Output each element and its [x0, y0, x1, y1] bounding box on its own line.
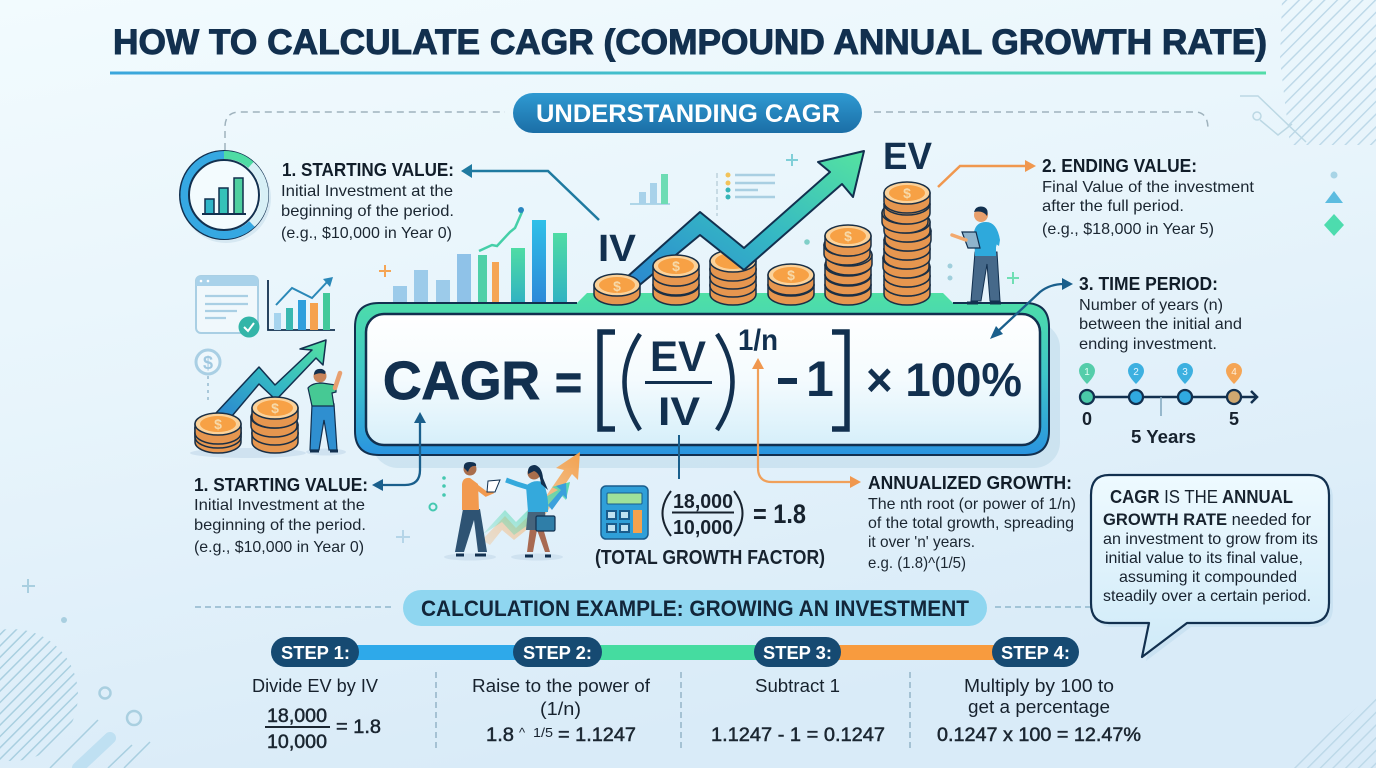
illustration: small chart [268, 277, 335, 330]
heading: calculation example [403, 590, 987, 626]
caption: total growth factor: (TOTAL GROWTH FACTOR) [595, 547, 825, 569]
formula: times 100 percent: × 100% [866, 353, 1022, 406]
total growth factor equation: = 1.8 [753, 499, 806, 529]
arrow: EV to ending value [938, 160, 1036, 187]
formula: fraction: IV [658, 390, 700, 434]
callout: CAGR definition: CAGR IS THE ANNUAL [1110, 487, 1293, 507]
coin stack 4: $ [787, 267, 795, 283]
step 1 content: 10,000 [267, 732, 327, 753]
text block: starting value top: Initial Investment at the [281, 183, 453, 200]
icon: calculator [601, 486, 648, 539]
illustration: browser window with check [196, 276, 260, 338]
title: HOW TO CALCULATE CAGR (COMPOUND ANNUAL GROWTH RATE) [113, 23, 1267, 62]
step 2 content: (1/n) [540, 699, 581, 719]
person pointing up [306, 369, 346, 456]
illustration: left coin stacks [190, 397, 306, 458]
text block: ending value: Final Value of the investment [1042, 179, 1255, 196]
step 1 content: = 1.8 [336, 717, 381, 738]
timeline: 5 years: 4 [1231, 367, 1237, 378]
formula: equals: = [555, 357, 582, 410]
step 4 content [937, 676, 1141, 746]
formula: minus one: 1 [806, 351, 834, 407]
step 1 pill [271, 637, 359, 667]
coin stack 3 [710, 250, 756, 305]
icon: ring with bar chart [180, 151, 271, 243]
text block: ending value: (e.g., $18,000 in Year 5) [1042, 221, 1214, 238]
formula: fraction [645, 333, 712, 434]
text block: starting value top: (e.g., $10,000 in Year 0) [281, 225, 452, 242]
arrow: time period double-headed [990, 278, 1073, 339]
step 1 content [252, 676, 381, 753]
text block: ending value [1042, 156, 1255, 238]
coin stack 2: $ [672, 258, 680, 274]
text block: annualized growth: of the total growth, spreading [868, 515, 1074, 532]
step 2 content: = 1.1247 [558, 725, 636, 746]
panel: formula box [355, 293, 1060, 468]
total growth factor equation [662, 491, 806, 539]
text block: starting value bottom: beginning of the period. [194, 517, 366, 534]
text block: annualized growth: it over 'n' years. [868, 534, 975, 551]
formula: minus one [778, 351, 834, 407]
connector: fraction to growth factor [678, 435, 680, 479]
coin stack 5 [824, 225, 872, 305]
text block: starting value bottom: Initial Investment at the [194, 497, 365, 514]
step 3 content: 1.1247 - 1 = 0.1247 [711, 725, 885, 746]
arrow: exponent to annualized growth [752, 358, 861, 488]
timeline: 5 years: 5 Years [1131, 427, 1196, 447]
text block: annualized growth [868, 473, 1076, 572]
text block: starting value top: beginning of the period. [281, 203, 454, 220]
step 3 pill [754, 637, 841, 667]
text block: time period: 3. TIME PERIOD: [1079, 274, 1218, 294]
illustration: two people with arrows [396, 452, 580, 560]
step 2 content: 1.8 [486, 725, 514, 746]
heading: understanding CAGR: UNDERSTANDING CAGR [536, 100, 840, 128]
step 3 pill: STEP 3: [763, 643, 832, 663]
step 2 pill [513, 637, 602, 667]
step 4 pill [992, 637, 1079, 667]
title underline [110, 72, 1266, 74]
coin stack 5: $ [844, 228, 852, 244]
text block: starting value top [281, 160, 454, 242]
step 3 content [711, 676, 885, 746]
formula: CAGR: CAGR [383, 351, 540, 411]
formula: fraction: EV [650, 333, 706, 381]
total growth factor equation: 18,000 [673, 491, 733, 513]
total growth factor equation: 10,000 [673, 517, 733, 539]
callout: CAGR definition: assuming it compounded [1119, 569, 1297, 586]
illustration: left growth arrow [216, 340, 326, 416]
text block: starting value bottom: 1. STARTING VALUE: [194, 475, 368, 495]
person with tablet [952, 207, 1001, 303]
coin stack 1: $ [613, 278, 621, 294]
step 3 content: Subtract 1 [755, 676, 840, 696]
coin stack 1 [594, 274, 640, 305]
growth arrow [627, 151, 864, 288]
step 1 pill: STEP 1: [281, 643, 350, 663]
callout: CAGR definition [1091, 475, 1333, 661]
arrow: IV to starting value [461, 164, 599, 220]
text block: starting value bottom [194, 475, 368, 556]
step 4 content: 0.1247 x 100 = 12.47% [937, 725, 1141, 746]
steps progress band [271, 637, 1079, 667]
formula: exponent: 1/n [738, 324, 778, 357]
text block: starting value top: 1. STARTING VALUE: [282, 160, 454, 180]
label: IV: IV [598, 228, 637, 270]
step 1 content: Divide EV by IV [252, 676, 378, 696]
step 2 content: Raise to the power of [472, 676, 651, 696]
coin stack 4 [768, 264, 814, 305]
coin stack 2 [653, 255, 699, 305]
step 4 content: Multiply by 100 to [964, 676, 1114, 696]
heading: calculation example: CALCULATION EXAMPLE: GROWING AN INVESTMENT [421, 596, 970, 621]
coin stack 6: $ [903, 185, 911, 201]
text block: annualized growth: e.g. (1.8)^(1/5) [868, 555, 966, 572]
coin stack 6 [882, 182, 931, 305]
arrow: CAGR to starting value bottom [372, 412, 426, 491]
formula: brackets and parentheses [600, 332, 847, 429]
text block: ending value: 2. ENDING VALUE: [1042, 156, 1197, 176]
step 2 content: 1/5 [533, 725, 553, 740]
text block: time period: ending investment. [1079, 336, 1217, 353]
heading: understanding CAGR [513, 93, 862, 133]
callout: CAGR definition: initial value to its final value, [1105, 550, 1303, 567]
timeline: 5 years: 3 [1182, 367, 1188, 378]
decorative mini icons [379, 154, 1344, 284]
label: EV: EV [883, 136, 933, 178]
callout: CAGR definition: steadily over a certain period. [1103, 588, 1311, 605]
text block: annualized growth: The nth root (or power of 1/n) [868, 496, 1076, 513]
step 1 content: 18,000 [267, 706, 327, 727]
text block: ending value: after the full period. [1042, 198, 1184, 215]
timeline: 5 years: 5 [1229, 409, 1239, 429]
step 4 pill: STEP 4: [1001, 643, 1070, 663]
bar chart behind formula [393, 207, 567, 306]
timeline: 5 years: 2 [1133, 367, 1139, 378]
timeline: 5 years: 0 [1082, 409, 1092, 429]
illustration: left coin stacks: $ [214, 416, 222, 432]
text block: starting value bottom: (e.g., $10,000 in Year 0) [194, 539, 364, 556]
text block: time period: between the initial and [1079, 316, 1242, 333]
step 2 pill: STEP 2: [523, 643, 592, 663]
illustration: left coin stacks: $ [271, 400, 279, 416]
text block: time period: Number of years (n) [1079, 297, 1223, 314]
timeline: 5 years: 1 [1084, 367, 1090, 378]
step 2 content: ^ [519, 725, 526, 740]
step 2 content [472, 676, 651, 746]
step 4 content: get a percentage [968, 697, 1110, 717]
text block: annualized growth: ANNUALIZED GROWTH: [868, 473, 1072, 493]
timeline: 5 years [1079, 363, 1257, 447]
callout: CAGR definition: an investment to grow from its [1103, 531, 1318, 548]
formula: parentheses [624, 334, 732, 430]
icon: dollar coin with dotted line [196, 350, 220, 400]
callout: CAGR definition: GROWTH RATE needed for [1103, 510, 1311, 529]
text block: time period [1079, 274, 1242, 353]
icon: dollar coin with dotted line: $ [203, 353, 213, 373]
